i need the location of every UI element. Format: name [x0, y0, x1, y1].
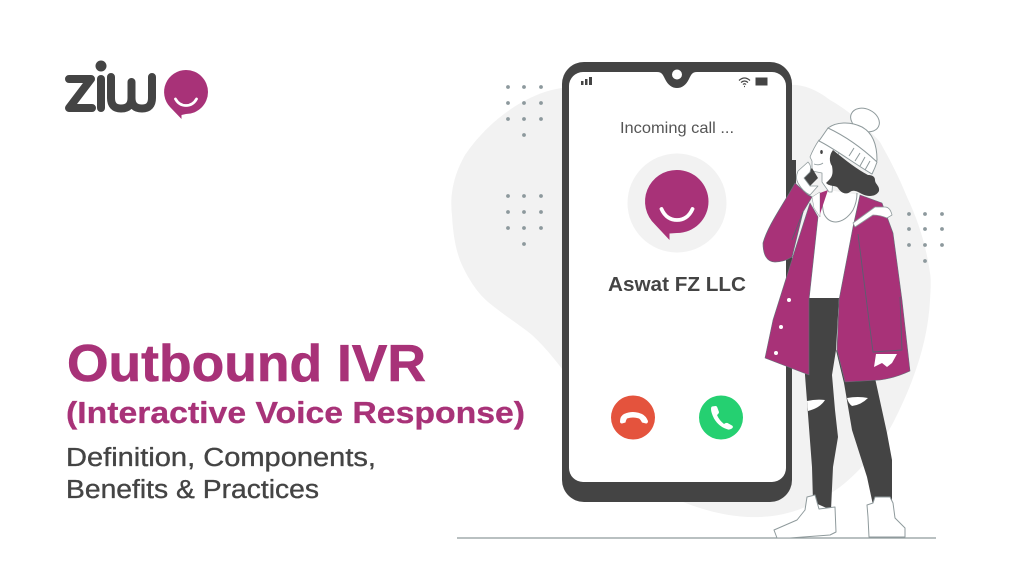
- right leg: [836, 350, 892, 505]
- logo i dot: [96, 60, 106, 72]
- jacket right panel: [837, 195, 910, 382]
- neckline: [822, 193, 857, 222]
- left leg: [805, 298, 839, 510]
- logo: ziwo: [69, 60, 208, 119]
- title: Outbound IVR: [67, 335, 426, 393]
- signal icon: [581, 77, 592, 85]
- battery icon: [756, 78, 768, 86]
- jacket right sleeve line: [858, 234, 902, 352]
- dot grid: lower left: [506, 194, 543, 246]
- dot grid: right: [907, 212, 944, 263]
- hat: [819, 104, 883, 174]
- eye: [820, 150, 823, 154]
- sleeve inner fold: [792, 212, 803, 240]
- phone: [562, 62, 796, 502]
- background blob: [451, 85, 931, 517]
- avatar circle: [628, 154, 726, 252]
- camera: [672, 70, 682, 80]
- logo wordmark letters: [69, 77, 152, 108]
- hair: [826, 150, 879, 196]
- shirt: [809, 190, 860, 300]
- ground line: [457, 537, 936, 539]
- neck and face: [810, 140, 840, 192]
- smile: [814, 163, 823, 165]
- description line 2: Benefits & Practices: [66, 476, 319, 504]
- left shoe: [774, 495, 836, 538]
- description line 1: Definition, Components,: [66, 444, 376, 472]
- knee rips: [807, 397, 868, 411]
- jacket collar: [820, 190, 828, 214]
- phone side button: [788, 160, 796, 190]
- avatar smile: [662, 209, 692, 220]
- jacket buttons: [774, 298, 791, 355]
- incoming call label: Incoming call ...: [620, 120, 734, 137]
- caller name: Aswat FZ LLC: [608, 273, 746, 296]
- phone body: [562, 62, 792, 502]
- hand: [796, 162, 818, 195]
- dot grid: upper left: [506, 85, 543, 137]
- avatar bubble: [645, 170, 709, 240]
- woman figure: [763, 104, 910, 538]
- white collar: [812, 192, 820, 217]
- decline button: [611, 396, 655, 440]
- logo smile: [176, 99, 196, 106]
- logo speech bubble: [164, 70, 208, 119]
- phone at ear: [803, 168, 818, 188]
- jacket hood: [853, 207, 892, 227]
- jacket left sleeve: [763, 183, 812, 262]
- wifi icon: [739, 78, 750, 86]
- accept button: [699, 396, 743, 440]
- right hand: [874, 354, 897, 367]
- phone screen: [569, 72, 786, 482]
- jacket left panel: [765, 203, 818, 375]
- subtitle: (Interactive Voice Response): [66, 395, 525, 430]
- right shoe: [867, 497, 905, 537]
